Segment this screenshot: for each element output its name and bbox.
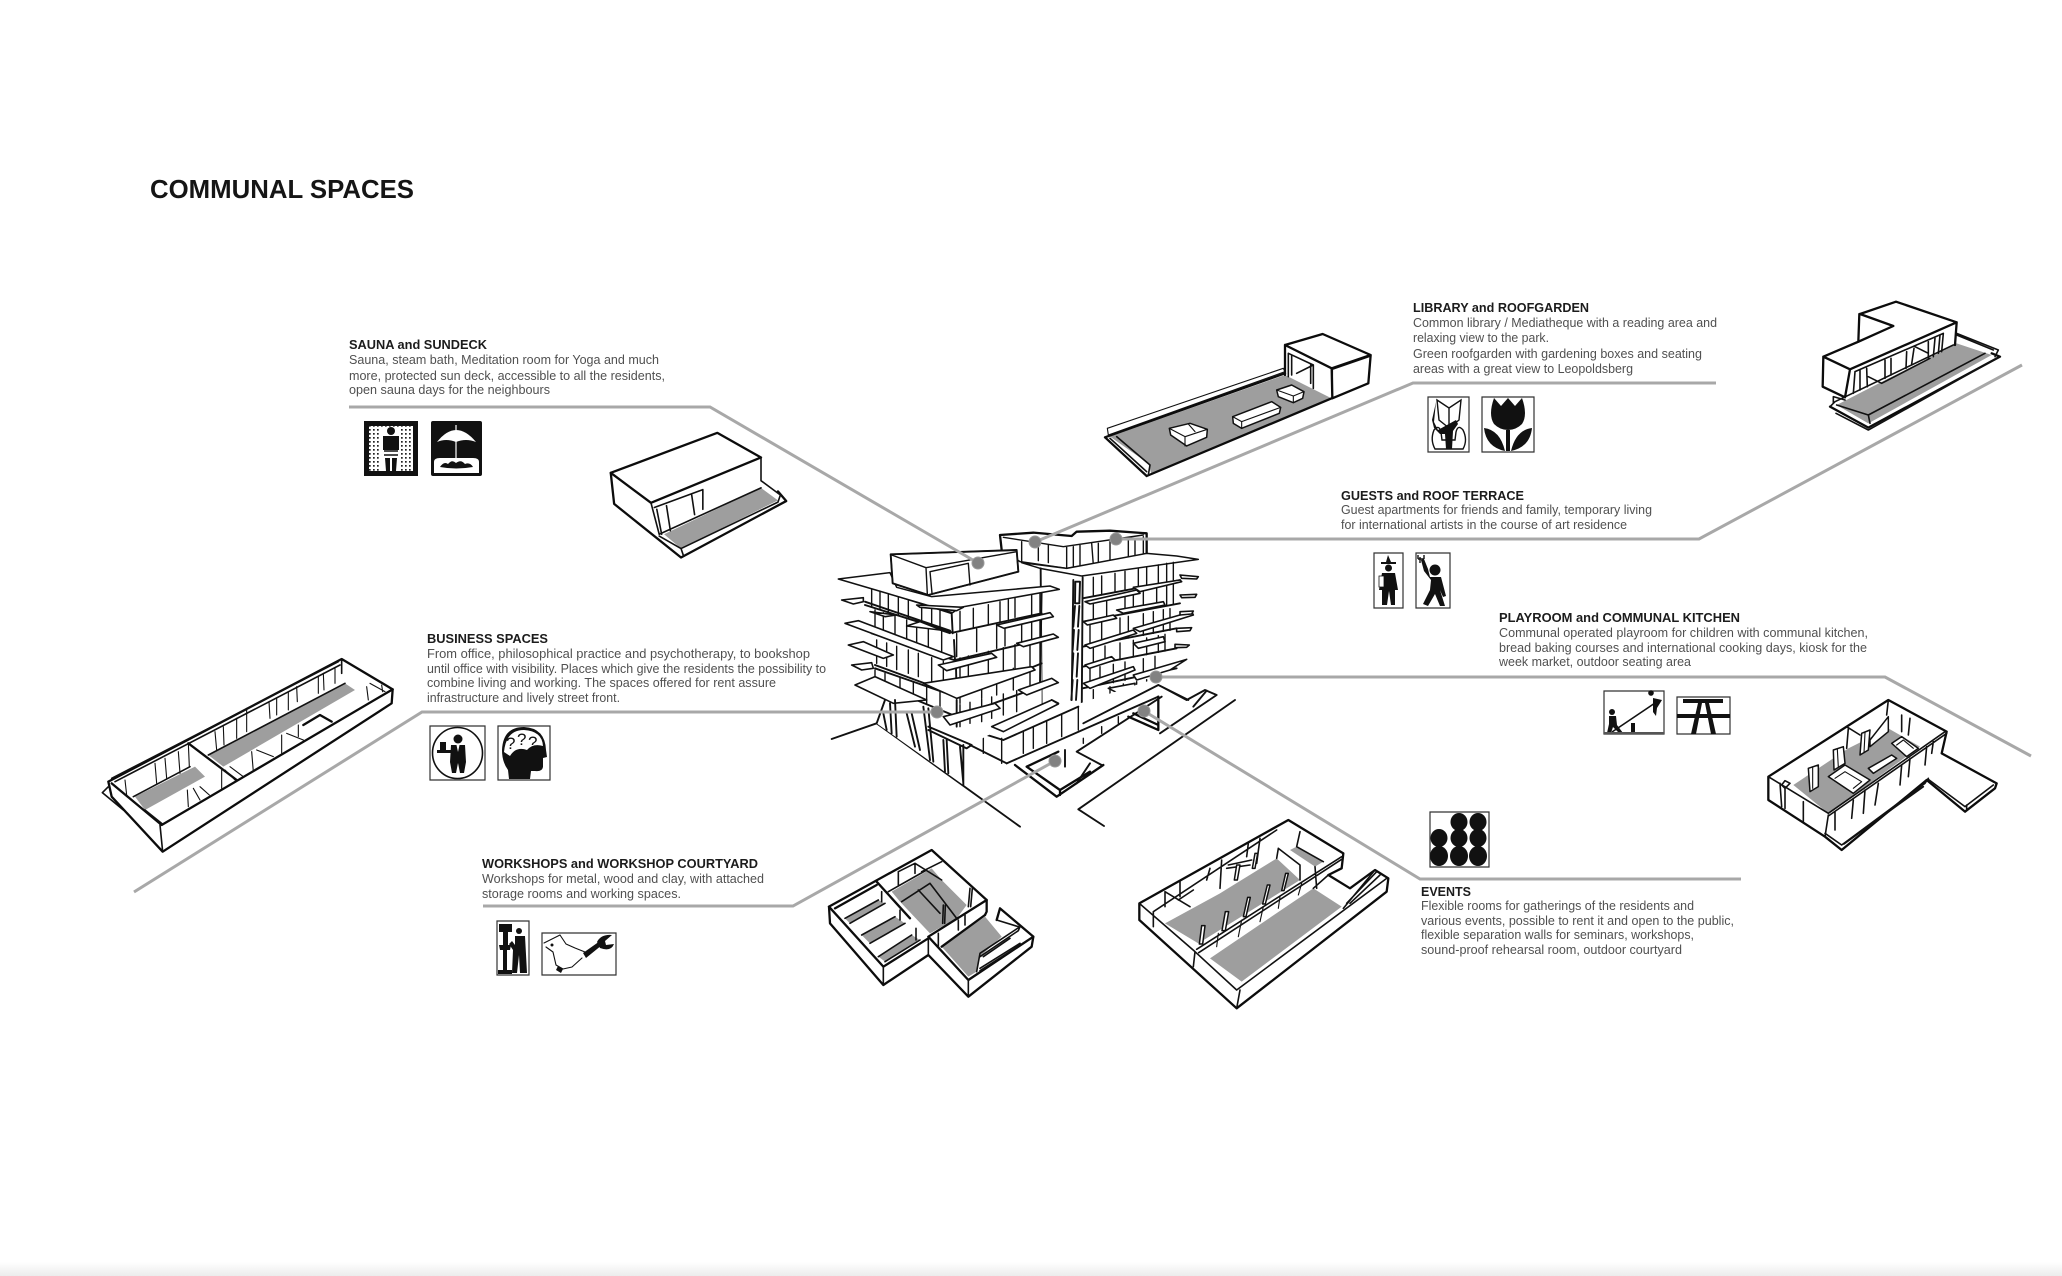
panel: guests and roof terrace <box>1110 302 2022 608</box>
text block: playroom: Communal operated playroom for children with communal kitchen, <box>1499 625 1868 640</box>
icon: drill press worker <box>497 921 529 975</box>
heading: business: BUSINESS SPACES <box>427 631 548 646</box>
icon: seesaw <box>1604 690 1664 734</box>
panel: workshops and courtyard <box>482 755 1061 997</box>
text block: guests <box>1341 502 1652 532</box>
axonometric: events hall <box>1139 820 1388 1008</box>
leader: playroom <box>1150 671 2031 756</box>
icon: head with question marks <box>498 726 550 780</box>
panel: library and roofgarden <box>1029 300 1717 548</box>
icon: head with question marks: ? <box>528 733 537 752</box>
icon: person in sauna <box>364 421 418 476</box>
text block: business: infrastructure and lively street front. <box>427 690 620 705</box>
leader: business <box>134 706 943 892</box>
leader: library <box>1029 383 1716 548</box>
icon: picnic table <box>1677 697 1730 734</box>
heading: events: EVENTS <box>1421 884 1471 899</box>
leader: workshops <box>483 755 1061 906</box>
street lines <box>832 700 1235 827</box>
panel: business spaces <box>102 631 943 892</box>
axonometric: playroom <box>1768 700 1997 850</box>
text block: guests: Guest apartments for friends and family, temporary living <box>1341 502 1652 517</box>
axonometric: sauna and deck <box>611 433 786 557</box>
text block: events: sound-proof rehearsal room, outdoor courtyard <box>1421 942 1682 957</box>
icon: head with question marks: ? <box>506 734 515 753</box>
text block: workshops: Workshops for metal, wood and clay, with attached <box>482 871 764 886</box>
text block: library: Green roofgarden with gardening boxes and seating <box>1413 346 1702 361</box>
text block: sauna: open sauna days for the neighbours <box>349 382 550 397</box>
central building axonometric <box>832 531 1235 827</box>
heading: sauna: SAUNA and SUNDECK <box>349 337 488 352</box>
title: COMMUNAL SPACES <box>150 174 414 204</box>
axonometric: library roofgarden <box>1105 334 1371 476</box>
axonometric: guest apartments and terrace <box>1823 302 2000 430</box>
icon: waiter <box>430 726 485 780</box>
text block: business <box>427 646 826 705</box>
text block: business: until office with visibility. Places which give the residents the possibility to <box>427 661 826 676</box>
heading: library: LIBRARY and ROOFGARDEN <box>1413 300 1589 315</box>
heading: guests: GUESTS and ROOF TERRACE <box>1341 488 1524 503</box>
text block: sauna: Sauna, steam bath, Meditation room for Yoga and much <box>349 352 659 367</box>
icon: traveller with hat <box>1374 553 1403 608</box>
ground floor columns <box>877 700 1007 785</box>
text block: library <box>1413 315 1717 376</box>
heading: workshops: WORKSHOPS and WORKSHOP COURTYARD <box>482 856 758 871</box>
icon: person walking with candelabra <box>1416 553 1450 608</box>
leader: sauna <box>349 407 984 569</box>
icon: tulip <box>1482 397 1534 452</box>
icon: head with question marks: ? <box>517 730 526 749</box>
axonometric: workshops <box>829 850 1033 997</box>
roof box on left volume <box>891 550 1018 595</box>
text block: workshops: storage rooms and working spaces. <box>482 886 681 901</box>
left volume <box>838 573 1059 745</box>
text block: library: relaxing view to the park. <box>1413 330 1549 345</box>
right volume <box>1022 553 1198 727</box>
text block: events: flexible separation walls for seminars, workshops, <box>1421 927 1694 942</box>
text block: guests: for international artists in the course of art residence <box>1341 517 1627 532</box>
text block: library: Common library / Mediatheque with a reading area and <box>1413 315 1717 330</box>
text block: sauna <box>349 352 665 397</box>
text block: business: From office, philosophical practice and psychotherapy, to bookshop <box>427 646 810 661</box>
icon: audience heads <box>1430 812 1489 867</box>
text block: playroom <box>1498 625 1868 669</box>
text block: sauna: more, protected sun deck, accessible to all the residents, <box>349 368 665 383</box>
icon: hands with wrench <box>542 933 616 975</box>
leader: events <box>1138 705 1741 879</box>
penthouse on right volume <box>1000 531 1147 568</box>
axonometric: business spaces <box>102 659 393 852</box>
text block: events: various events, possible to rent it and open to the public, <box>1421 913 1734 928</box>
base and courtyards <box>960 677 1217 797</box>
text block: workshops <box>482 871 764 901</box>
panel: events <box>1138 705 1741 1008</box>
icon: sun umbrella <box>431 421 482 476</box>
panel: sauna and sundeck <box>349 337 984 569</box>
icon: reader in armchair <box>1428 397 1469 452</box>
text block: events: Flexible rooms for gatherings of the residents and <box>1421 898 1694 913</box>
heading: playroom: PLAYROOM and COMMUNAL KITCHEN <box>1499 610 1740 625</box>
panel: playroom and communal kitchen <box>1150 610 2031 850</box>
leader: guests <box>1110 365 2022 545</box>
text block: events <box>1421 898 1734 957</box>
text block: playroom: week market, outdoor seating area <box>1498 654 1692 669</box>
text block: playroom: bread baking courses and international cooking days, kiosk for the <box>1499 640 1867 655</box>
text block: library: areas with a great view to Leopoldsberg <box>1413 361 1633 376</box>
text block: business: combine living and working. The spaces offered for rent assure <box>427 675 776 690</box>
